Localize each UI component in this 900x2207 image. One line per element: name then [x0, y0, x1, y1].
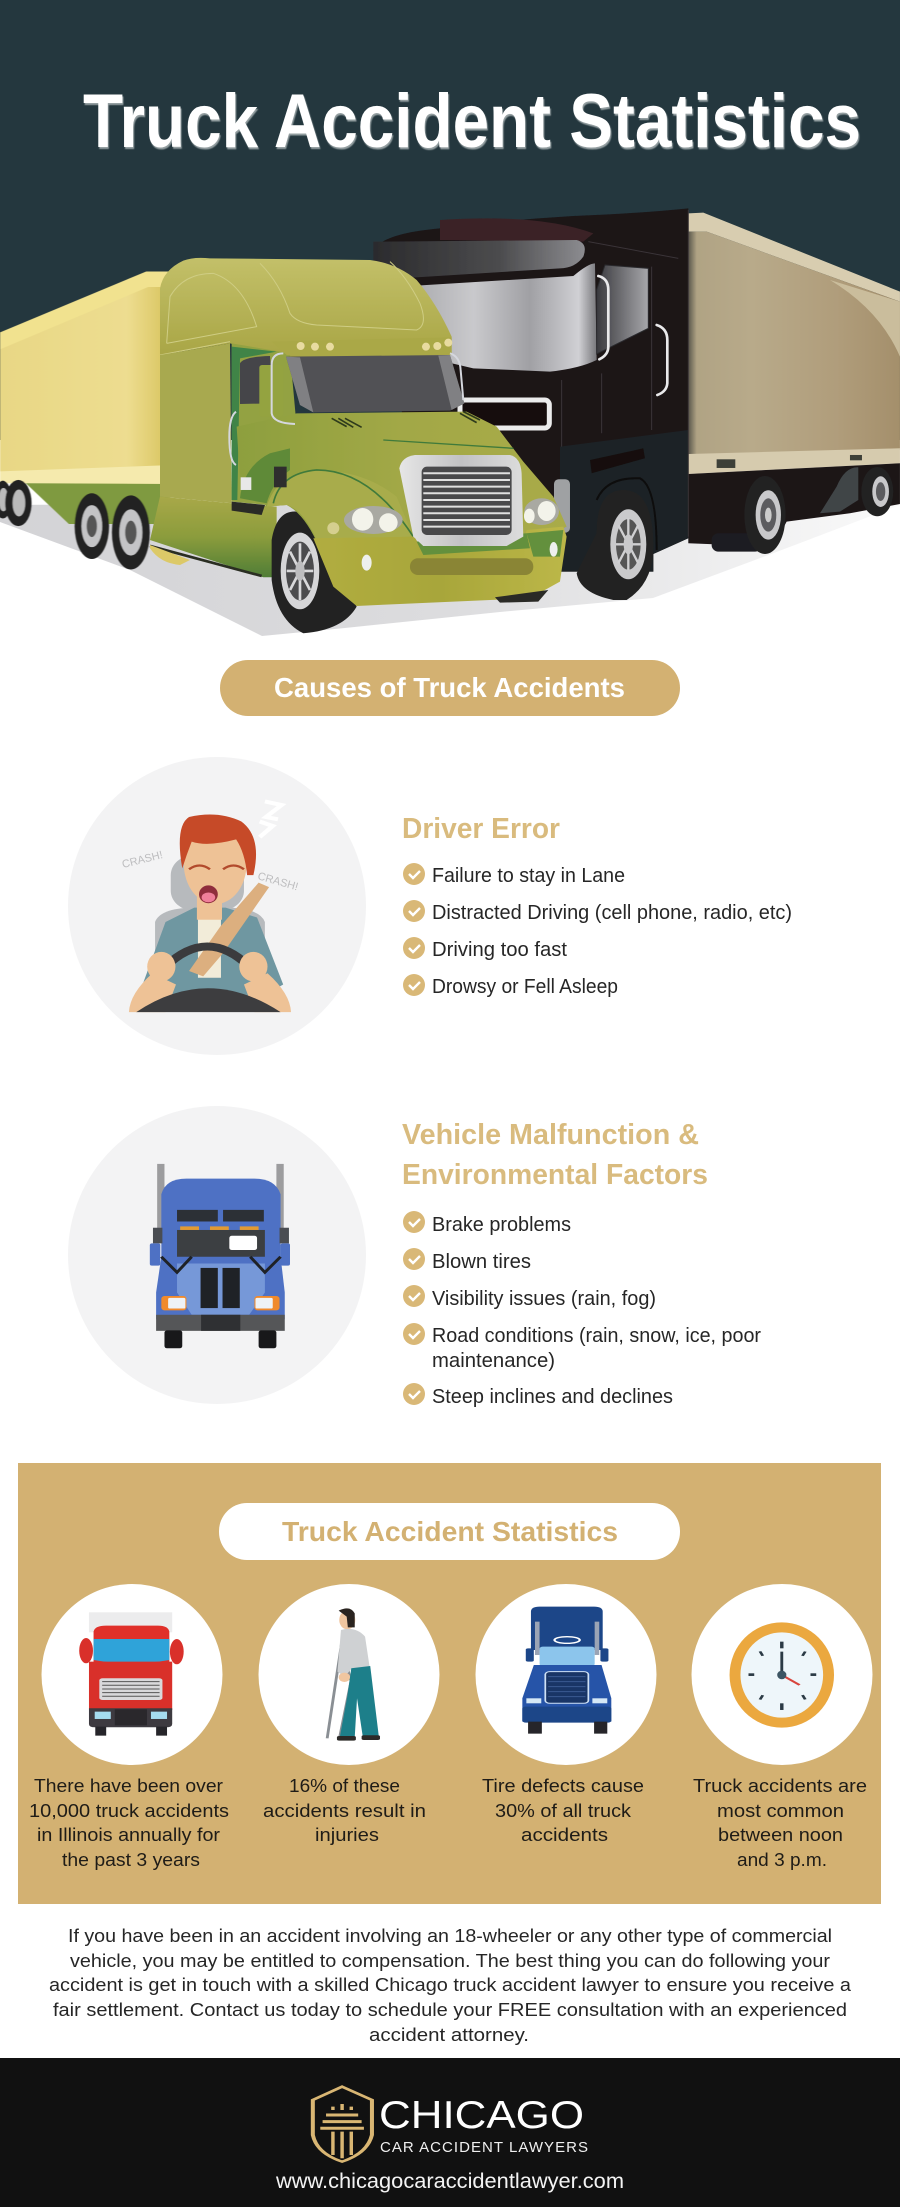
headlights — [327, 498, 559, 534]
logo wordmark: CHICAGO — [379, 2094, 584, 2137]
chrome handles — [598, 276, 667, 395]
stat: time of day — [692, 1584, 872, 1870]
list: driver error causes: Drowsy or Fell Asleep — [432, 976, 618, 998]
list: driver error causes: Distracted Driving (cell phone, radio, etc) — [432, 902, 792, 924]
stat text — [263, 1775, 426, 1845]
front tire — [272, 512, 357, 633]
section heading: statistics — [219, 1503, 680, 1560]
visor — [373, 240, 585, 280]
section heading: causes — [220, 660, 680, 716]
closing paragraph — [49, 1925, 852, 2045]
label: crash right: CRASH! — [256, 870, 299, 893]
yellow trailer body — [0, 271, 169, 488]
trailer wheels — [712, 467, 893, 554]
door details — [232, 467, 287, 515]
closing paragraph: fair settlement. Contact us today to schedule your FREE consultation with an experienced — [53, 1999, 847, 2020]
stat: truck accidents annually — [29, 1584, 229, 1870]
list: vehicle causes: Visibility issues (rain, fog) — [432, 1288, 656, 1310]
stat text: Tire defects cause — [482, 1775, 644, 1796]
windshield — [373, 263, 597, 372]
trailer lower band — [0, 465, 169, 484]
stat text: Truck accidents are — [693, 1775, 867, 1796]
side window — [597, 265, 648, 354]
bumper — [313, 527, 567, 606]
stat text: accidents — [521, 1824, 608, 1845]
stat text: between noon — [718, 1824, 843, 1845]
ground shadow — [0, 500, 900, 636]
door — [232, 343, 297, 505]
visor band and lamps — [272, 337, 452, 359]
list: vehicle causes: Steep inclines and declines — [432, 1386, 673, 1408]
stat text — [693, 1775, 867, 1870]
stat text: accidents result in — [263, 1800, 426, 1821]
heading: vehicle malfunction: Vehicle Malfunction & — [402, 1119, 699, 1151]
side panel — [160, 343, 232, 503]
section heading: causes: Causes of Truck Accidents — [274, 672, 625, 703]
roof fairing — [160, 258, 452, 358]
list: vehicle causes: Road conditions (rain, snow, ice, poor — [432, 1325, 761, 1347]
far light — [554, 479, 570, 533]
sill line — [150, 546, 262, 576]
list: vehicle causes: Blown tires — [432, 1251, 531, 1273]
stat: tire defects — [476, 1584, 656, 1845]
list: driver error causes: Driving too fast — [432, 939, 567, 961]
fairing panel lines — [160, 262, 423, 493]
heading: vehicle malfunction: Environmental Factors — [402, 1159, 708, 1191]
illustration: yellow trailer and rear wheels — [0, 271, 169, 569]
grille — [399, 455, 523, 546]
logo tagline: CAR ACCIDENT LAWYERS — [380, 2139, 588, 2156]
stat text: the past 3 years — [62, 1849, 200, 1870]
panel: truck accident statistics — [18, 1463, 881, 1904]
stat text: in Illinois annually for — [37, 1824, 220, 1845]
white grille — [460, 400, 549, 428]
label: crash: CRASH! — [121, 849, 164, 871]
icon: clock — [730, 1622, 834, 1728]
stat text — [29, 1775, 229, 1870]
closing paragraph: vehicle, you may be entitled to compensation. The best thing you can do following your — [70, 1950, 830, 1971]
stat text: injuries — [315, 1824, 379, 1845]
list: driver error causes: Failure to stay in Lane — [432, 865, 625, 887]
heading: vehicle malfunction — [402, 1119, 708, 1191]
trailer top rim — [0, 271, 169, 349]
header background — [0, 0, 900, 480]
closing paragraph: If you have been in an accident involving an 18-wheeler or any other type of commercial — [68, 1925, 832, 1946]
footer — [0, 2058, 900, 2207]
icon: navy truck — [522, 1607, 611, 1734]
chassis — [26, 483, 169, 524]
wheels — [0, 480, 150, 569]
side window — [240, 356, 273, 404]
front wheel — [577, 490, 653, 600]
list: vehicle causes: maintenance) — [432, 1350, 555, 1372]
section heading: statistics: Truck Accident Statistics — [282, 1516, 618, 1547]
heading: driver error: Driver Error — [402, 813, 560, 845]
website: www.chicagocaraccidentlawyer.com — [275, 2170, 624, 2193]
closing paragraph: accident attorney. — [369, 2024, 529, 2045]
logo shield — [313, 2087, 372, 2162]
stat text: There have been over — [34, 1775, 223, 1796]
panel: vehicle malfunction — [68, 1106, 761, 1408]
cab body — [373, 208, 688, 572]
list: vehicle causes — [403, 1211, 761, 1408]
stat: injuries — [258, 1584, 440, 1845]
panel: driver error — [68, 757, 792, 1055]
illustration: green truck cab — [150, 258, 567, 633]
hood and fender — [237, 412, 567, 542]
stat text — [482, 1775, 644, 1845]
icon: blue truck — [68, 1106, 366, 1404]
trailer body — [688, 213, 900, 547]
mirror — [229, 353, 463, 465]
illustration: black truck with beige trailer — [373, 208, 900, 600]
icon: red truck — [79, 1612, 184, 1736]
windshield — [286, 355, 464, 412]
icon: man on crutches — [327, 1608, 380, 1741]
stat text: and 3 p.m. — [737, 1849, 827, 1870]
stat text: 10,000 truck accidents — [29, 1800, 229, 1821]
stat text: 16% of these — [289, 1775, 400, 1796]
white road area — [0, 440, 900, 660]
vents — [332, 412, 480, 427]
stat text: 30% of all truck — [495, 1800, 632, 1821]
closing paragraph: accident is get in touch with a skilled Chicago truck accident lawyer to ensure you receive a — [49, 1974, 852, 1995]
step — [150, 545, 190, 565]
side skirt — [150, 497, 277, 577]
list: vehicle causes: Brake problems — [432, 1214, 571, 1236]
icon: sleeping driver — [68, 757, 366, 1055]
list: driver error causes — [403, 863, 792, 998]
stat text: most common — [717, 1800, 844, 1821]
